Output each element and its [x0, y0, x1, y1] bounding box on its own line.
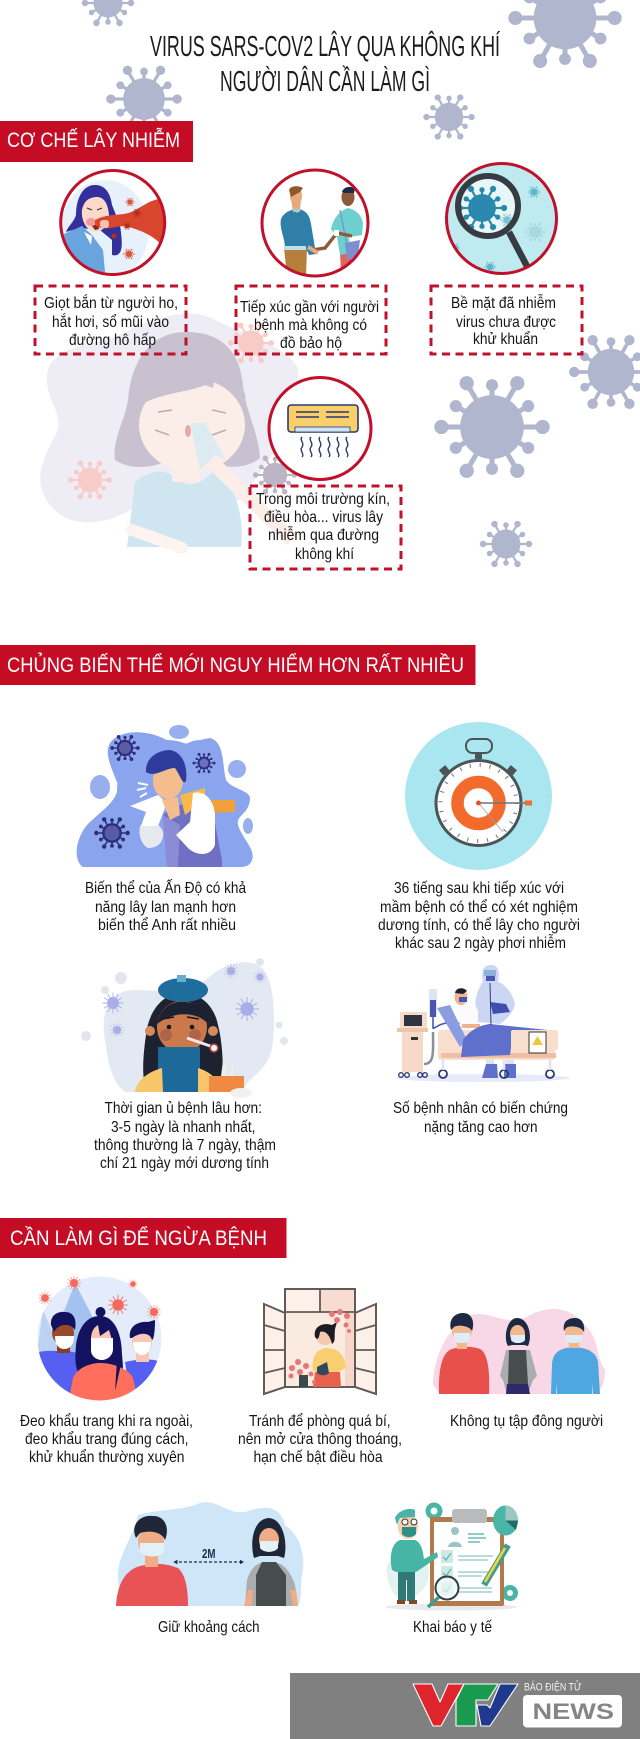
callout: bề mặt nhiễm virus: virus chưa được [456, 314, 556, 331]
text: không tụ tập: Không tụ tập đông người [450, 1413, 603, 1430]
text: tránh để phòng quá bí: Tránh để phòng quá bí, [249, 1412, 391, 1430]
text: 36 tiếng: dương tính, có thể lây cho người [378, 916, 580, 934]
illustration: hospital bed [396, 965, 570, 1082]
callout: bề mặt nhiễm virus: Bề mặt đã nhiễm [451, 293, 556, 312]
callout: môi trường kín: nhiễm qua đường [268, 525, 379, 544]
text: biến chứng: nặng tăng cao hơn [424, 1119, 538, 1136]
illustration: stopwatch [405, 722, 552, 870]
callout: tiếp xúc gần [236, 286, 386, 354]
callout: môi trường kín: điều hòa... virus lây [264, 509, 383, 526]
text: thời gian ủ bệnh: chí 21 ngày mới dương tính [100, 1155, 269, 1172]
footer logo: VTV News: BÁO ĐIỆN TỬ [524, 1680, 582, 1694]
illustration: girl with fever [81, 958, 288, 1098]
text: thời gian ủ bệnh [94, 1100, 276, 1172]
text: giữ khoảng cách: Giữ khoảng cách [158, 1619, 260, 1636]
text: khai báo y tế: Khai báo y tế [413, 1619, 492, 1636]
callout: giọt bắn [35, 286, 186, 354]
callout: giọt bắn: hắt hơi, sổ mũi vào [52, 312, 169, 331]
section heading: cơ chế lây nhiễm: CƠ CHẾ LÂY NHIỄM [7, 129, 180, 152]
icon: magnifier over virus [446, 164, 556, 274]
background viruses [82, 0, 640, 567]
callout: tiếp xúc gần: đồ bảo hộ [280, 335, 342, 352]
section heading: chủng biến thể: CHỦNG BIẾN THỂ MỚI NGUY HIỂM HƠN RẤT NHIỀU [7, 653, 464, 677]
callout: giọt bắn: Giọt bắn từ người ho, [44, 293, 178, 312]
text: tránh để phòng quá bí: nên mở cửa thông thoáng, [238, 1431, 402, 1448]
text: biến thể Ấn Độ: biến thể Anh rất nhiều [98, 916, 236, 934]
logo mark: VTV [413, 1684, 518, 1726]
faded illustration: sick girl with tissue [40, 314, 298, 548]
callout: môi trường kín [250, 486, 401, 569]
callout: môi trường kín: Trong môi trường kín, [256, 491, 390, 508]
callout: tiếp xúc gần: bệnh mà không có [254, 317, 367, 334]
icon: coughing woman [61, 170, 168, 280]
title: NGƯỜI DÂN CẦN LÀM GÌ [220, 64, 430, 98]
text: biến thể Ấn Độ: năng lây lan mạnh hơn [95, 899, 236, 916]
illustration: people wearing masks [30, 1276, 162, 1405]
text: biến thể Ấn Độ: Biến thể của Ấn Độ có khả [85, 878, 246, 897]
text: biến chứng: Số bệnh nhân có biến chứng [393, 1100, 568, 1117]
illustration: medical declaration [385, 1502, 518, 1610]
text: tránh để phòng quá bí: hạn chế bật điều hòa [254, 1449, 383, 1466]
footer logo: VTV News [290, 1673, 640, 1739]
illustration: open window with woman [264, 1289, 376, 1394]
footer logo: VTV News: NEWS [532, 1699, 614, 1724]
callout: môi trường kín: không khí [295, 546, 354, 563]
text: 36 tiếng: khác sau 2 ngày phơi nhiễm [395, 933, 566, 952]
text: đeo khẩu trang: khử khuẩn thường xuyên [29, 1448, 184, 1466]
text: thời gian ủ bệnh: 3-5 ngày là nhanh nhất, [111, 1119, 256, 1136]
section heading: cơ chế lây nhiễm [0, 121, 193, 162]
icon: air conditioner [269, 378, 371, 480]
text: 36 tiếng: mầm bệnh có thể có xét nghiệm [380, 898, 578, 916]
title [150, 29, 501, 98]
text: 36 tiếng: 36 tiếng sau khi tiếp xúc với [394, 880, 564, 897]
text: đeo khẩu trang: đeo khẩu trang đúng cách, [25, 1430, 188, 1448]
callout: tiếp xúc gần: Tiếp xúc gần với người [240, 299, 379, 316]
section heading: cần làm gì [0, 1218, 286, 1258]
text: biến thể Ấn Độ [85, 878, 246, 934]
text: thời gian ủ bệnh: Thời gian ủ bệnh lâu hơn: [104, 1100, 262, 1117]
text: đeo khẩu trang [20, 1412, 193, 1466]
icon: two men shaking hands [262, 170, 368, 276]
callout: bề mặt nhiễm virus: khử khuẩn [473, 330, 538, 348]
text: 36 tiếng [378, 880, 580, 952]
illustration: keeping 2M distance: 2M [202, 1547, 216, 1561]
text: thời gian ủ bệnh: thông thường là 7 ngày, thậm [94, 1137, 276, 1154]
section heading: chủng biến thể [0, 645, 476, 685]
callout: bề mặt nhiễm virus [431, 286, 582, 354]
illustration: three masked people [433, 1309, 605, 1394]
text: đeo khẩu trang: Đeo khẩu trang khi ra ngoài, [20, 1412, 193, 1430]
illustration: keeping 2M distance [116, 1502, 303, 1606]
callout: giọt bắn: đường hô hấp [69, 332, 156, 349]
section heading: cần làm gì: CẦN LÀM GÌ ĐỂ NGỪA BỆNH [10, 1227, 267, 1250]
illustration: person sneezing [77, 725, 253, 867]
text: tránh để phòng quá bí [238, 1412, 402, 1466]
text: biến chứng [393, 1100, 568, 1136]
